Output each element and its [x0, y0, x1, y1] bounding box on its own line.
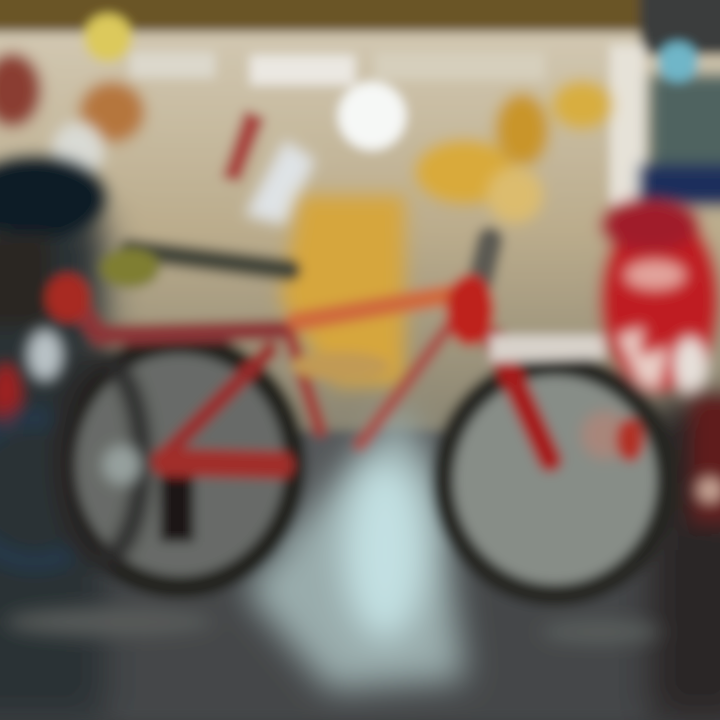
wall shelf band with pale signage blur [130, 45, 645, 205]
ceiling band [0, 0, 720, 55]
yellow board behind bicycle [280, 195, 405, 385]
icon: yellow ceiling lamp [84, 14, 132, 62]
hanging items on the wall [0, 54, 612, 225]
frame highlights [46, 248, 644, 462]
floor reflection [245, 405, 465, 690]
dark equipment at left [0, 156, 107, 562]
top right dark corner with blue light [640, 42, 720, 205]
icon: white round lamp [338, 82, 406, 150]
red garment at right [602, 199, 720, 525]
bicycle frame [70, 240, 550, 465]
left wheel [58, 343, 295, 587]
right wheel [443, 365, 667, 595]
unblurred bottom edge backing [0, 600, 720, 720]
